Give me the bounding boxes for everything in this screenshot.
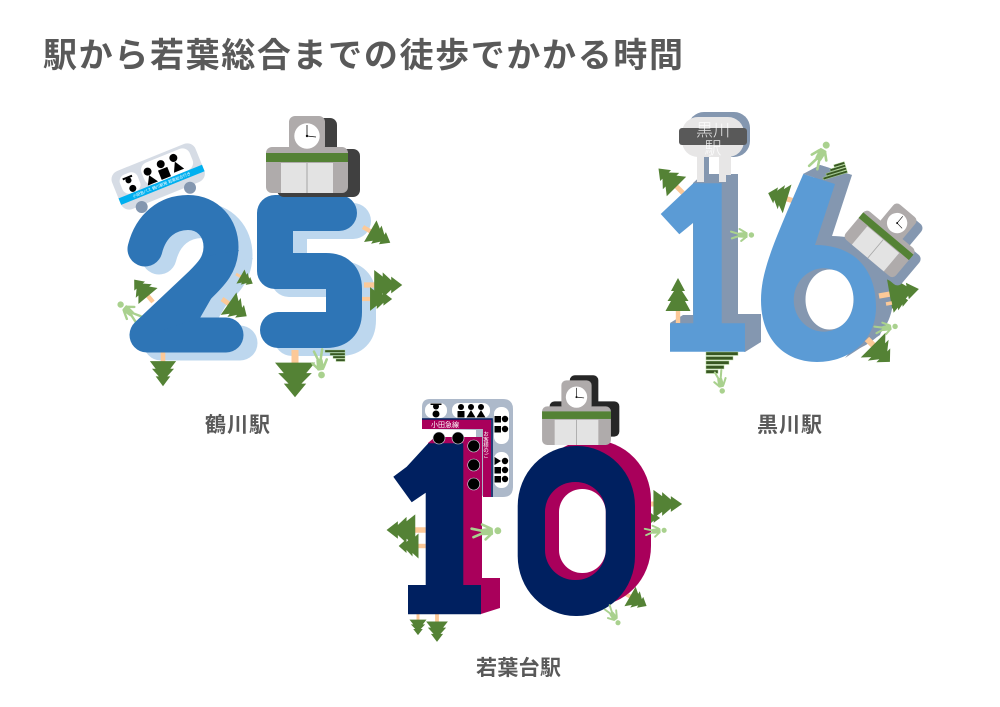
number 25 shadow (147, 220, 358, 343)
number 0 depth (533, 440, 651, 606)
icon: tree below 5 (275, 350, 315, 397)
icon: station building (542, 375, 619, 445)
icon: bus L-shaped: 小田急線 (431, 420, 459, 429)
icon: walker below 0 (602, 604, 624, 628)
icon: bus L-shaped (422, 399, 513, 497)
icon: tree top left of 1 (649, 159, 693, 203)
number 1 (661, 183, 745, 352)
icon: station sign: 駅 (704, 139, 722, 158)
icon: bus L-shaped: お客様のご (482, 431, 489, 459)
icon: tree left of 1 (387, 514, 426, 546)
icon: tree bottom right of 0 (618, 583, 652, 616)
icon: tree upper right of 5 (357, 216, 397, 254)
icon: station sign: 黒川 (696, 121, 730, 140)
icon: tree right of 6 (876, 274, 921, 311)
icon: walker left of 2 (114, 297, 143, 325)
icon: station building (266, 116, 360, 197)
icon: walker right of 6 (874, 320, 899, 336)
icon: runner top of 6 (806, 138, 835, 172)
icon: small tree right of 5 (362, 287, 392, 311)
icon: bus (109, 141, 208, 213)
label: Kurokawa station: 黒川駅 (757, 414, 822, 437)
number 6 (761, 174, 876, 362)
panel: Kurokawa 16 minutes (649, 112, 940, 395)
icon: walker right of 0 (645, 525, 667, 538)
label: Tsurukawa station: 鶴川駅 (205, 414, 270, 437)
icon: tree left of 2 (125, 272, 163, 310)
icon: station sign (679, 112, 750, 182)
title: 駅から若葉総合までの徒歩でかかる時間 (43, 37, 683, 75)
icon: tree below 2 (150, 352, 176, 386)
panel: Tsurukawa 25 minutes (109, 116, 402, 397)
icon: small tree right of 6 (884, 290, 910, 314)
icon: tree right of 0 (643, 490, 682, 518)
icon: tree right of 5 (364, 270, 402, 300)
icon: small tree on 2 (232, 267, 257, 291)
icon: tree below 1 (426, 614, 448, 642)
icon: walker on 1 (731, 229, 754, 241)
icon: tree left of 6 (764, 179, 798, 215)
icon: upright tree left of 1 (666, 278, 690, 323)
icon: bus: 小田急バス 鶴川駅発 若葉総合行き (131, 170, 191, 199)
bus wheels (433, 432, 480, 490)
number 25 (133, 212, 344, 335)
icon: station building rotated (841, 190, 940, 288)
panel: Wakabadai 10 minutes (387, 375, 682, 642)
number 1 depth (428, 437, 500, 614)
icon: walker under 5 (311, 349, 329, 379)
icon: stairs top of 6 (820, 162, 848, 180)
icon: stairs under 5 (325, 350, 345, 361)
icon: small tree left of 1 (399, 534, 426, 558)
number 0 (518, 446, 635, 616)
number 16 depth (670, 165, 893, 358)
label: Wakabadai station: 若葉台駅 (476, 657, 561, 680)
number 1 (393, 443, 481, 614)
icon: stairs under 1 (706, 352, 738, 373)
icon: small tree right of 0 (638, 510, 660, 526)
icon: tree inside 2 (214, 288, 255, 328)
icon: tree bottom right of 6 (855, 327, 902, 374)
icon: walker under stairs (712, 370, 729, 395)
icon: small tree below 1 (410, 614, 426, 635)
icon: walker on 1 (471, 523, 502, 541)
